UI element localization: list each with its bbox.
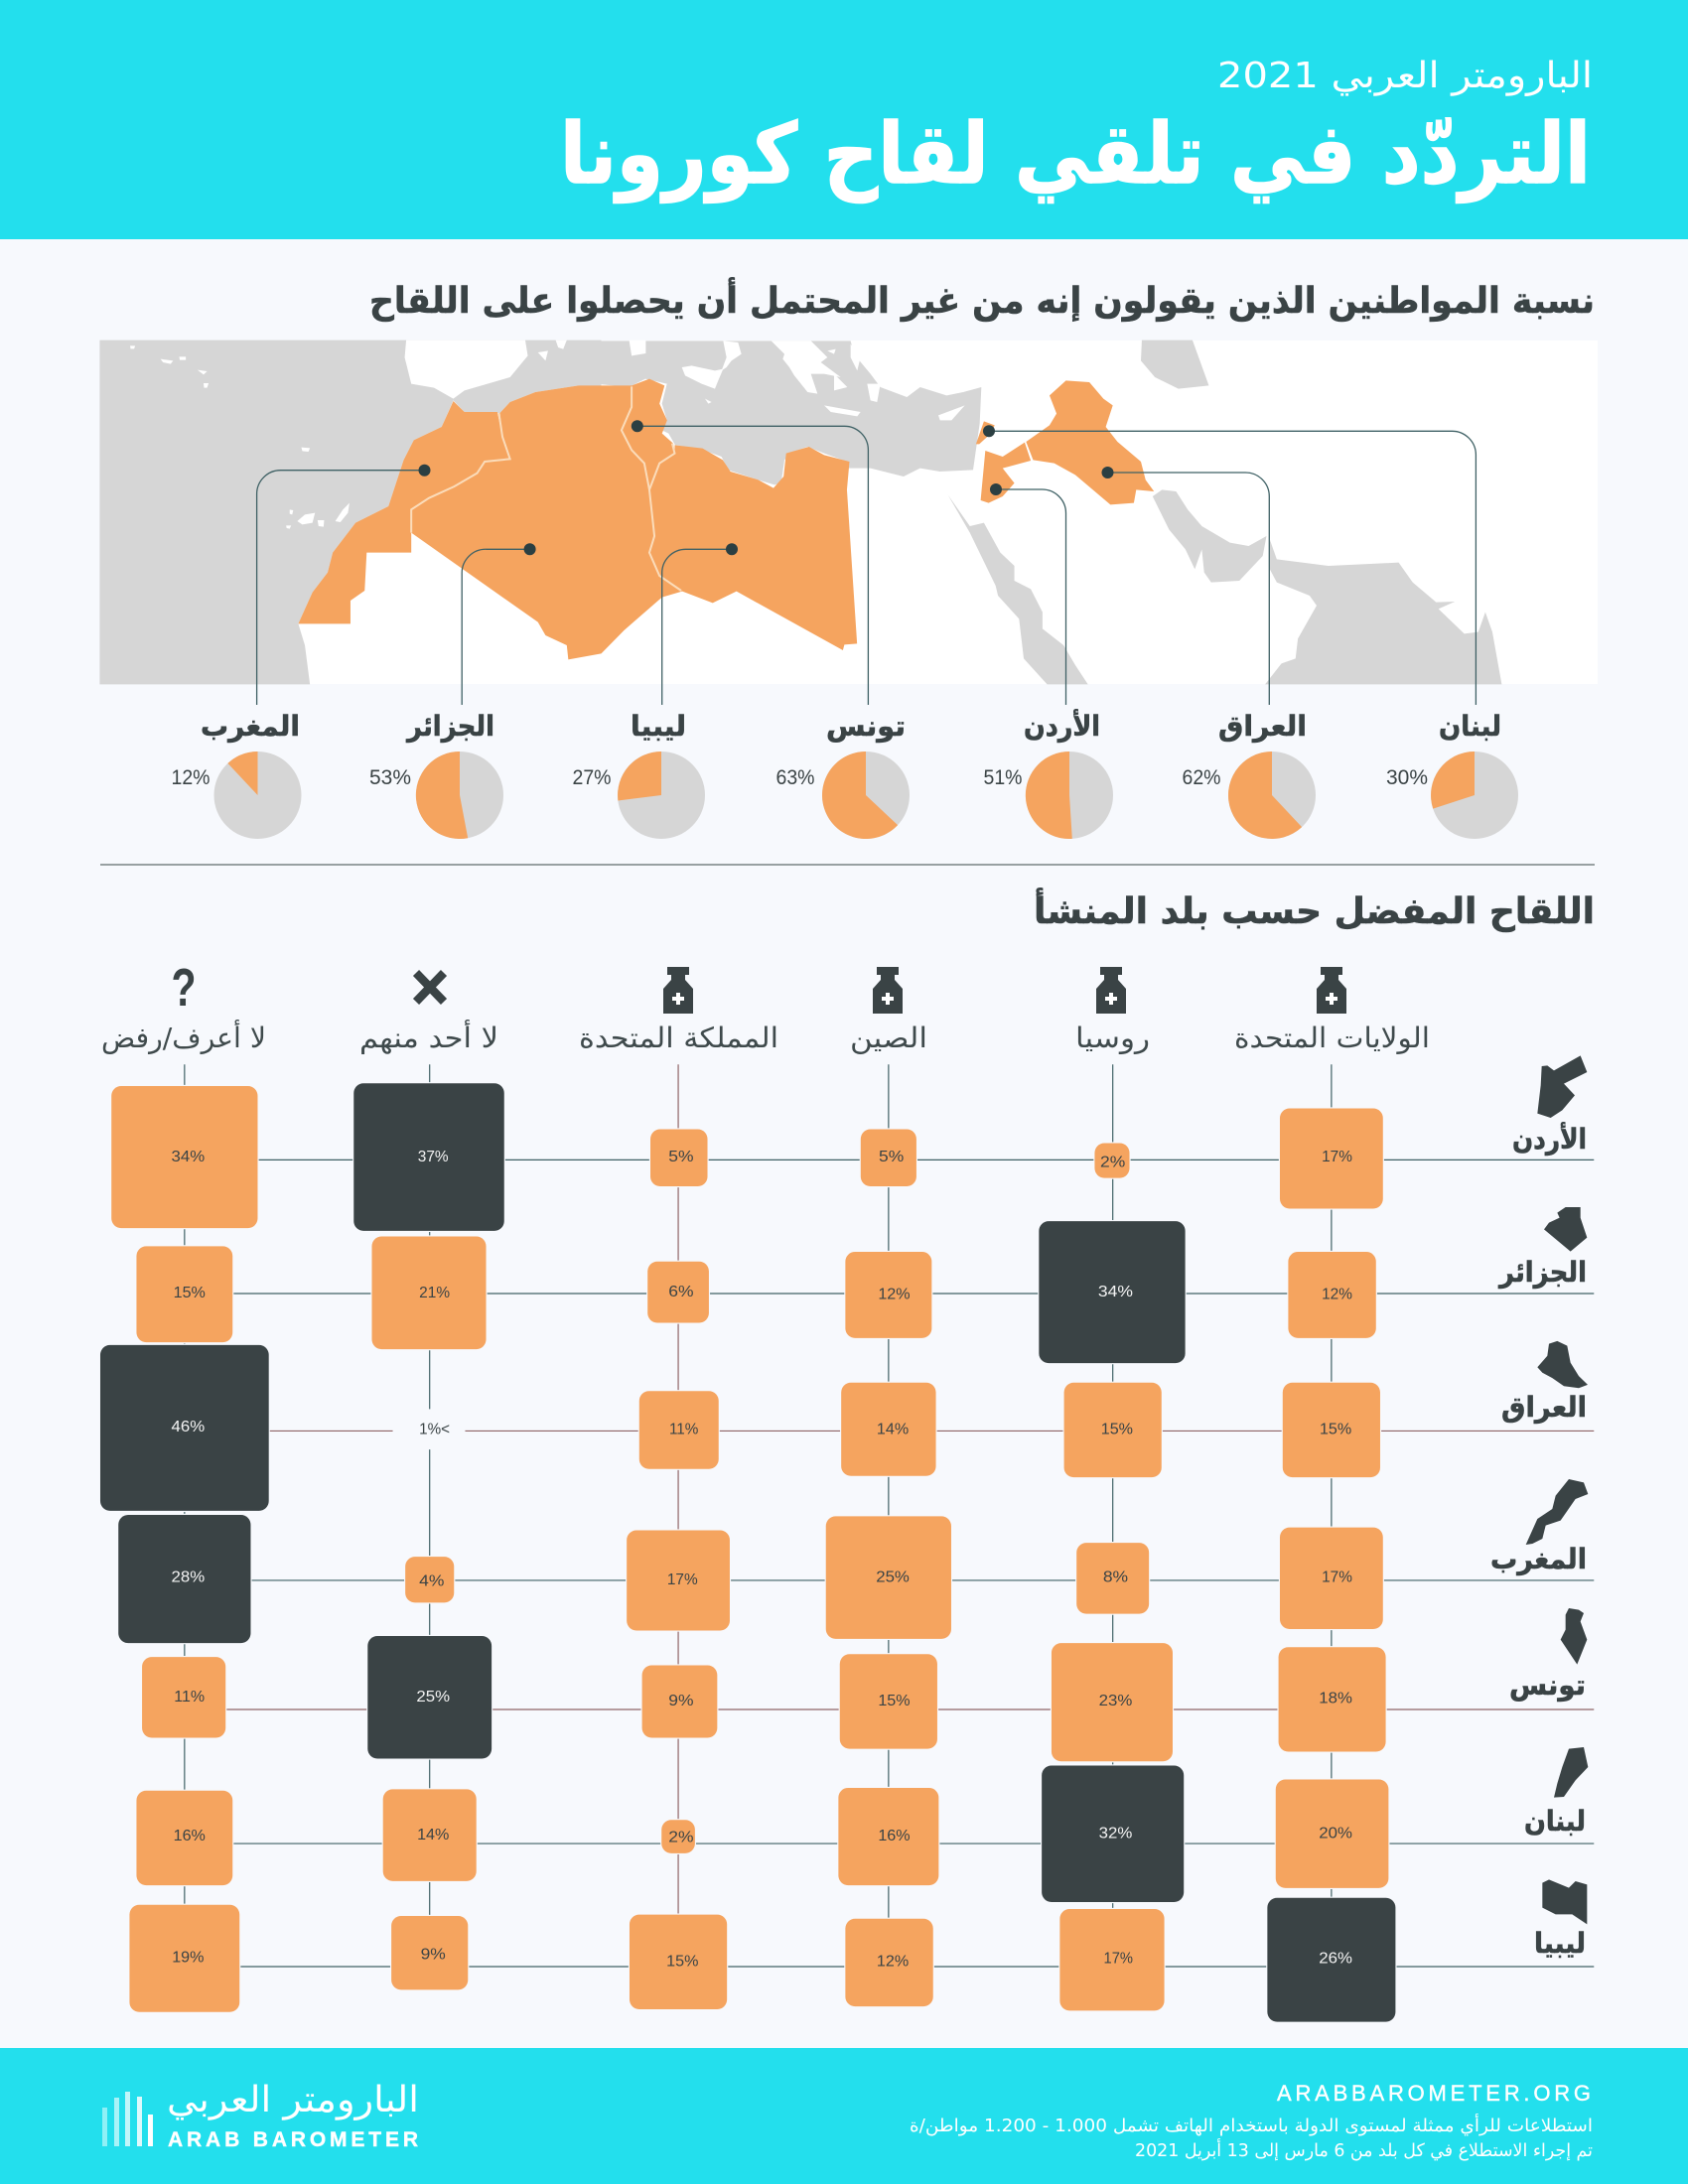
country row labels and icons: لبنان (1524, 1805, 1586, 1838)
row: Tunisia (142, 1636, 1386, 1761)
pie: Libya 27%: ليبيا (631, 710, 686, 743)
logo text: البارومتر العربي (167, 2080, 419, 2120)
heading: share unlikely to get vaccinated: نسبة المواطنين الذين يقولون إنه من غير المحتمل أن يحصلوا على اللقاح (369, 277, 1595, 322)
row: Libya: 17% (1104, 1951, 1133, 1968)
footer band (0, 2048, 1688, 2184)
row: Morocco: 8% (1103, 1569, 1128, 1585)
icon: Libya silhouette (1542, 1879, 1587, 1924)
country row labels and icons (1490, 1055, 1588, 1960)
connector: Morocco (257, 471, 425, 705)
country row labels and icons: الأردن (1512, 1122, 1587, 1156)
icon: Jordan silhouette (1537, 1055, 1587, 1118)
column headers: لا أعرف/رفض (101, 1019, 266, 1054)
row: Morocco: 25% (876, 1569, 910, 1585)
row: Tunisia: 18% (1319, 1690, 1352, 1706)
connector: Jordan (996, 489, 1066, 705)
row: Tunisia: 15% (878, 1693, 911, 1709)
row: Libya: 15% (666, 1953, 699, 1970)
row: Morocco: 28% (172, 1569, 206, 1585)
website: ARABBAROMETER.ORG (1277, 2081, 1591, 2106)
row: Lebanon: 16% (878, 1828, 911, 1844)
pie: Libya 27%: 27% (572, 766, 612, 789)
column headers: الصين (850, 1022, 927, 1054)
connector: Tunisia (637, 426, 868, 705)
header subtitle: البارومتر العربي 2021 (1217, 56, 1593, 96)
column headers: روسيا (1075, 1022, 1150, 1054)
header band (0, 0, 1688, 239)
row: Jordan: 34% (172, 1149, 206, 1165)
row: Lebanon (136, 1765, 1388, 1902)
row: Jordan: 5% (668, 1149, 694, 1165)
pie: Jordan 51% (983, 709, 1113, 839)
country row labels and icons: العراق (1501, 1391, 1587, 1424)
row: Algeria: 15% (174, 1285, 206, 1301)
icon: cross (416, 973, 444, 1002)
icon: Lebanon silhouette (1554, 1747, 1588, 1798)
pie: Morocco 12% (171, 710, 302, 839)
pie: Algeria 53% (369, 710, 503, 839)
footer band: تم إجراء الاستطلاع في كل بلد من 6 مارس إلى 13 أبريل 2021 (1135, 2138, 1593, 2161)
icon: Morocco silhouette (1526, 1479, 1588, 1545)
row: Libya (129, 1898, 1395, 2022)
pie: Tunisia 63% (776, 710, 910, 839)
row: Iraq: 11% (669, 1422, 699, 1438)
row: Jordan: 2% (1100, 1154, 1126, 1170)
row: Libya: 12% (877, 1953, 910, 1970)
pie: Tunisia 63%: 63% (776, 766, 814, 789)
row: Algeria: 21% (419, 1285, 450, 1301)
connector: Libya (662, 549, 732, 705)
row: Morocco: 4% (419, 1573, 445, 1590)
connector: Iraq (1108, 473, 1269, 705)
icon: Russia vaccine vial (1096, 967, 1126, 1014)
Algeria (411, 385, 682, 659)
row: Morocco: 17% (667, 1571, 698, 1588)
row: Algeria: 12% (1322, 1287, 1352, 1303)
heading: preferred vaccine by origin country: اللقاح المفضل حسب بلد المنشأ (1034, 887, 1595, 932)
pie: Libya 27% (572, 710, 705, 839)
Libya (649, 445, 857, 650)
row: Tunisia: 25% (416, 1689, 450, 1706)
row: Morocco: 17% (1322, 1569, 1352, 1585)
row: Lebanon: 32% (1099, 1825, 1133, 1842)
logo bars (102, 2092, 153, 2146)
column headers: لا أحد منهم (359, 1019, 498, 1054)
row: Morocco (118, 1515, 1383, 1643)
row: Algeria: 6% (668, 1284, 694, 1300)
pie: Algeria 53%: 53% (369, 766, 411, 789)
country row labels and icons: ليبيا (1534, 1927, 1586, 1960)
Morocco (298, 401, 510, 623)
icon: Algeria silhouette (1544, 1207, 1587, 1252)
row: Lebanon: 16% (174, 1828, 206, 1844)
country row labels and icons: تونس (1509, 1669, 1586, 1702)
row: Algeria: 12% (878, 1287, 911, 1303)
pie: Morocco 12%: 12% (171, 766, 211, 789)
pie: Morocco 12%: المغرب (201, 710, 300, 743)
row: Iraq: 14% (877, 1422, 910, 1438)
pie: Lebanon 30% (1386, 710, 1518, 839)
country row labels and icons: المغرب (1490, 1543, 1587, 1575)
icon: question mark: ? (171, 958, 197, 1018)
Tunisia (622, 379, 674, 489)
pie: Tunisia 63%: تونس (826, 710, 906, 743)
row: Lebanon: 2% (668, 1830, 694, 1846)
methodology note: استطلاعات للرأي ممثلة لمستوى الدولة باستخدام الهاتف تشمل 1.000 - 1.200 مواطن/ة (910, 2114, 1593, 2136)
connector: Lebanon (989, 431, 1476, 705)
icon: US vaccine vial (1317, 967, 1346, 1014)
row: Tunisia: 9% (668, 1693, 694, 1709)
row: Jordan: 37% (418, 1149, 449, 1165)
pie: Jordan 51%: الأردن (1024, 709, 1100, 743)
map dots (419, 420, 1114, 555)
pie: Jordan 51%: 51% (983, 766, 1023, 789)
country row labels and icons: الجزائر (1497, 1256, 1587, 1289)
row: Iraq: 1%< (419, 1422, 450, 1438)
main title: التردّد في تلقي لقاح كورونا (560, 105, 1591, 204)
column headers: المملكة المتحدة (579, 1022, 778, 1054)
row: Libya: 9% (421, 1946, 446, 1963)
row: Tunisia: 23% (1099, 1693, 1133, 1709)
Lebanon (976, 421, 995, 444)
Jordan (981, 443, 1031, 503)
row: Iraq: 15% (1320, 1422, 1352, 1438)
pie: Lebanon 30%: 30% (1386, 766, 1428, 789)
pie: Lebanon 30%: لبنان (1439, 710, 1501, 743)
row: Libya: 26% (1319, 1951, 1352, 1968)
icon: Tunisia silhouette (1561, 1608, 1587, 1665)
footer band: ARAB BAROMETER (168, 2128, 418, 2151)
pie: Iraq 62%: العراق (1218, 710, 1307, 743)
row: Iraq: 15% (1101, 1422, 1133, 1438)
row: Libya: 19% (172, 1949, 205, 1966)
pie: Iraq 62%: 62% (1182, 766, 1221, 789)
pie: Iraq 62% (1182, 710, 1316, 839)
row: Iraq (100, 1345, 1380, 1511)
column headers (101, 958, 1430, 1054)
map panel (99, 341, 1598, 684)
row: Lebanon: 14% (417, 1827, 450, 1843)
row: Iraq: 46% (172, 1419, 206, 1435)
vaccine preference grid (100, 1064, 1594, 2022)
row: Algeria: 34% (1098, 1284, 1133, 1300)
column headers: الولايات المتحدة (1234, 1022, 1430, 1054)
row: Tunisia: 11% (174, 1689, 205, 1706)
row: Jordan (111, 1083, 1383, 1231)
icon: Iraq silhouette (1537, 1341, 1588, 1388)
row: Algeria (136, 1221, 1376, 1363)
icon: China vaccine vial (873, 967, 903, 1014)
row: Jordan: 5% (879, 1149, 905, 1165)
row: Jordan: 17% (1322, 1149, 1352, 1165)
connector: Algeria (462, 549, 530, 705)
icon: UK vaccine vial (663, 967, 693, 1014)
row: Lebanon: 20% (1319, 1825, 1352, 1842)
Iraq (1026, 380, 1154, 504)
pie: Algeria 53%: الجزائر (405, 710, 494, 743)
